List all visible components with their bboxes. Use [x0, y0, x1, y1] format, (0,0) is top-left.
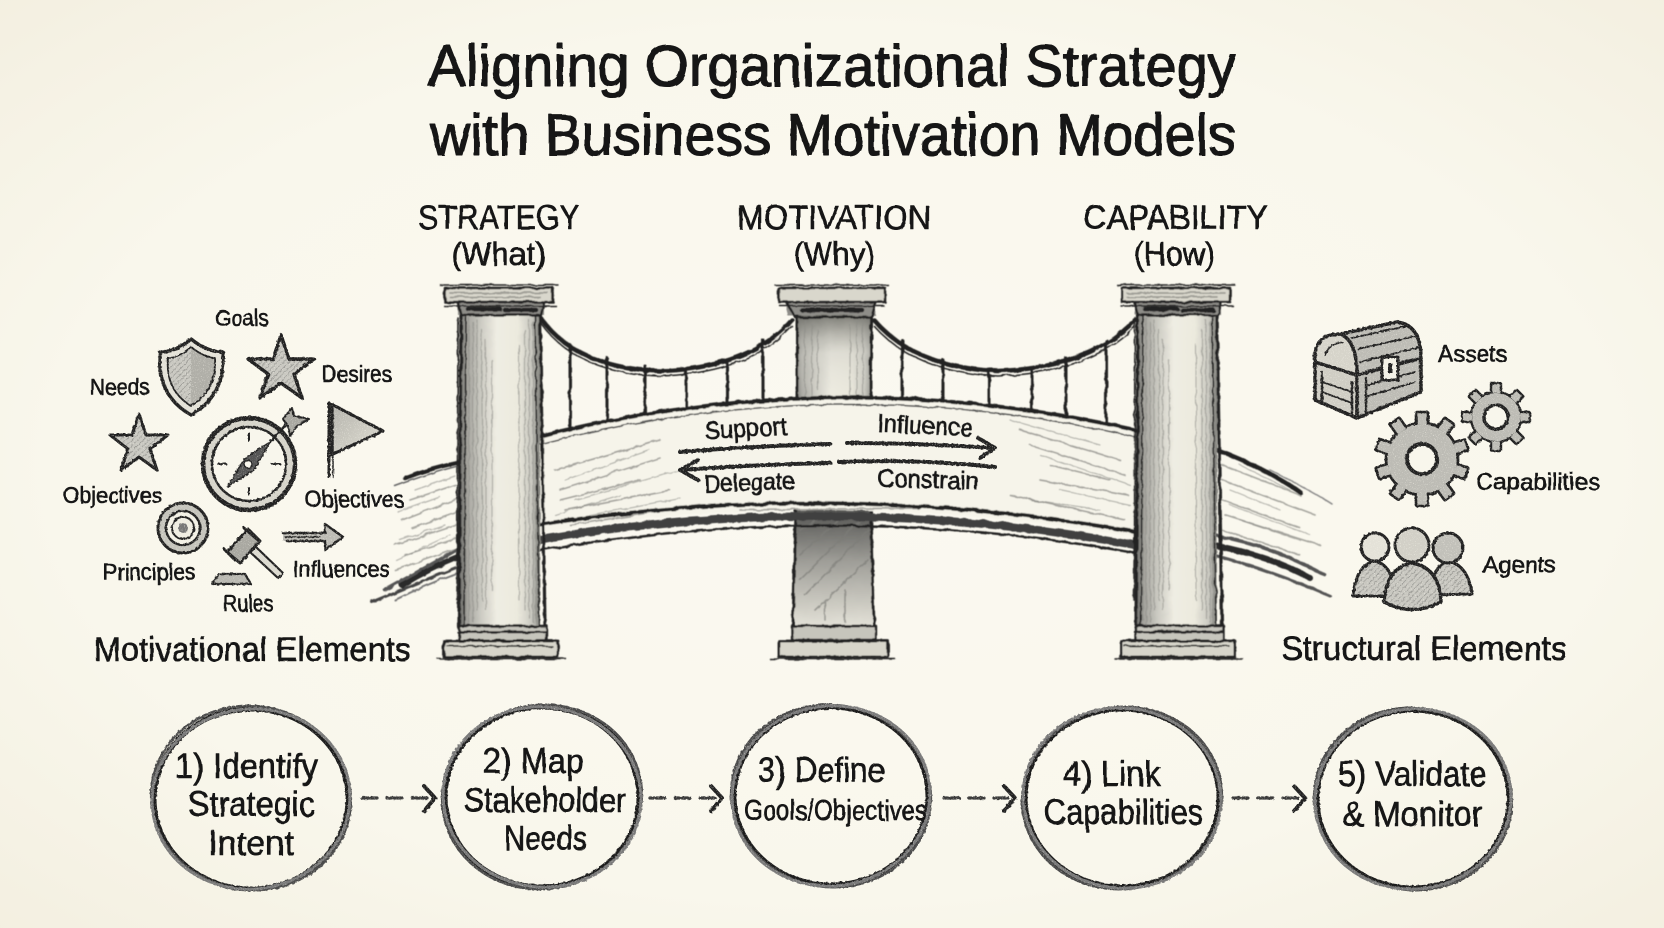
panel: motivational elements: [63, 305, 411, 669]
title: with Business Motivation Models: [429, 103, 1236, 168]
heading: structural elements: Structural Elements: [1281, 630, 1567, 668]
step 3 circle: [719, 692, 943, 900]
deck label: support: Support: [703, 413, 788, 445]
process steps: [139, 692, 1524, 903]
pillar heading: strategy: (What): [451, 236, 546, 272]
label: goals: Goals: [215, 305, 269, 331]
pillar heading: strategy: [418, 199, 580, 272]
arrow 1 to 2: [362, 786, 435, 811]
icon: influence arrow: [283, 524, 343, 550]
pillar heading: motivation: (Why): [794, 236, 875, 272]
suspension cables and hangers: [540, 317, 1135, 435]
label: desires: Desires: [322, 361, 392, 387]
label: capabilities: Capabilities: [1476, 469, 1600, 496]
icon: small gear: [1462, 383, 1530, 451]
step 1 circle: [139, 693, 363, 903]
centre pillar (motivation): [770, 285, 895, 659]
step 1 circle: Intent: [208, 824, 294, 863]
step 4 circle: 4) Link: [1063, 755, 1161, 794]
icon: gavel: [212, 528, 283, 584]
arrow 4 to 5: [1233, 786, 1305, 811]
icon: agents group: [1353, 528, 1472, 610]
label: principles: Principles: [103, 559, 196, 585]
icon: target: [158, 503, 208, 553]
step 1 circle: 1) Identify: [175, 747, 318, 786]
step 2 circle: [430, 692, 654, 902]
right deck approach: [1217, 450, 1332, 596]
label: agents: Agents: [1483, 552, 1556, 579]
left pillar (strategy): [438, 285, 566, 659]
icon: treasure chest: [1315, 322, 1421, 418]
step 2 circle: Needs: [504, 819, 587, 858]
label: objectives right: Objectives: [305, 486, 404, 512]
step 2 circle: Stakeholder: [464, 781, 626, 820]
icon: shield: [160, 339, 223, 415]
pillar heading: capability: (How): [1134, 236, 1215, 272]
deck label: delegate: Delegate: [704, 467, 795, 499]
step 2 circle: 2) Map: [483, 742, 584, 781]
title: Aligning Organizational Strategy: [428, 34, 1236, 99]
label: needs: Needs: [90, 374, 150, 400]
right pillar (capability): [1115, 285, 1243, 659]
pillar heading: motivation: MOTIVATION: [737, 199, 931, 237]
pillar heading: motivation: [737, 199, 931, 272]
label: rules: Rules: [223, 590, 273, 616]
step 4 circle: Capabilities: [1044, 793, 1203, 832]
icon: goal star: [248, 335, 314, 398]
label: objectives left: Objectives: [63, 482, 162, 508]
icon: objective star: [110, 414, 168, 470]
arrow 2 to 3: [650, 786, 722, 811]
icon: large gear: [1375, 412, 1469, 506]
deck relationship arrows: [680, 438, 995, 480]
left deck approach: [372, 462, 460, 602]
pillar heading: capability: [1083, 199, 1268, 272]
step 5 circle: [1302, 695, 1524, 903]
deck label: constrain: Constrain: [877, 464, 979, 496]
title: [428, 34, 1236, 168]
pillar heading: strategy: STRATEGY: [418, 199, 580, 237]
arrow 3 to 4: [944, 786, 1015, 811]
icon: flag: [329, 403, 383, 477]
icon: compass with arrow: [203, 408, 309, 510]
step 4 circle: [1010, 694, 1234, 902]
bridge illustration: [372, 285, 1332, 659]
label: influences: Influences: [293, 556, 390, 582]
step 1 circle: Strategic: [188, 785, 315, 824]
step 5 circle: 5) Validate: [1338, 755, 1487, 794]
step 3 circle: 3) Define: [758, 751, 885, 790]
step 5 circle: & Monitor: [1342, 795, 1483, 834]
deck label: influence: Influence: [876, 410, 974, 442]
label: assets: Assets: [1438, 341, 1507, 368]
panel: structural elements: [1281, 322, 1600, 668]
heading: motivational elements: Motivational Elements: [94, 631, 411, 669]
pillar heading: capability: CAPABILITY: [1083, 199, 1268, 237]
step 3 circle: Gools/Objectives: [744, 795, 927, 827]
main bridge deck: [537, 398, 1135, 553]
